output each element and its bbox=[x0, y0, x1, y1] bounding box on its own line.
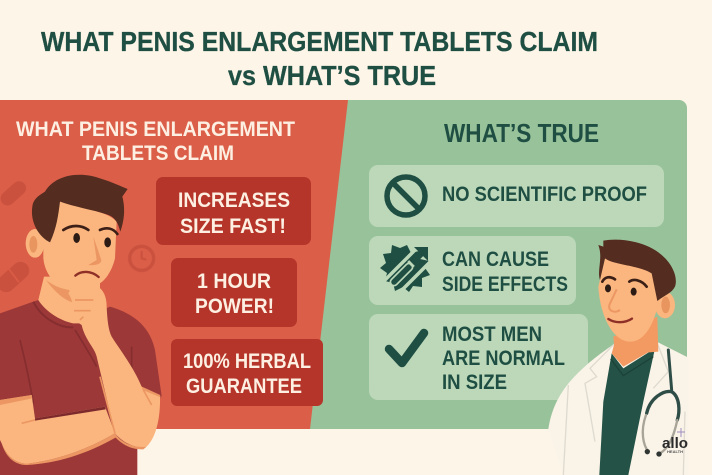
item: most men are normal in size: IN SIZE bbox=[442, 371, 507, 394]
claim: increases size fast: INCREASES bbox=[178, 189, 290, 212]
item: can cause side effects bbox=[369, 236, 576, 305]
claim: increases size fast bbox=[156, 177, 311, 245]
item: most men are normal in size: ARE NORMAL bbox=[442, 347, 565, 370]
lab coat, shirt and stethoscope bbox=[548, 337, 688, 475]
icons: faint pills and clock bbox=[0, 178, 154, 296]
heading: claims: WHAT PENIS ENLARGEMENT bbox=[16, 118, 295, 141]
claim: 1 hour power bbox=[171, 258, 297, 327]
item: no scientific proof: NO SCIENTIFIC PROOF bbox=[442, 183, 647, 206]
head bbox=[26, 175, 128, 302]
heading: what's true: WHAT’S TRUE bbox=[444, 118, 599, 148]
title bbox=[41, 26, 598, 91]
item: can cause side effects: SIDE EFFECTS bbox=[442, 273, 568, 296]
head bbox=[598, 240, 676, 355]
title: WHAT PENIS ENLARGEMENT TABLETS CLAIM bbox=[41, 26, 598, 57]
arms and hand bbox=[0, 284, 161, 465]
title: vs WHAT’S TRUE bbox=[228, 60, 436, 91]
logo: allo health: HEALTH bbox=[667, 450, 684, 454]
claim: 100% herbal guarantee bbox=[171, 339, 323, 406]
item: no scientific proof bbox=[369, 165, 664, 227]
illustration: worried man bbox=[0, 175, 162, 475]
panel: claims bbox=[0, 100, 348, 429]
icon: burst with arrows bbox=[380, 245, 434, 296]
illustration: doctor bbox=[548, 240, 688, 475]
claim: 100% herbal guarantee: GUARANTEE bbox=[186, 375, 302, 398]
logo: allo health bbox=[662, 428, 688, 454]
claim: 100% herbal guarantee: 100% HERBAL bbox=[183, 350, 311, 373]
claim: 1 hour power: 1 HOUR bbox=[197, 270, 271, 293]
heading: claims bbox=[16, 118, 295, 165]
claim: increases size fast: SIZE FAST! bbox=[180, 215, 286, 238]
item: most men are normal in size: MOST MEN bbox=[442, 323, 542, 346]
panel: what's true bbox=[300, 100, 687, 429]
item: most men are normal in size bbox=[369, 314, 588, 400]
item: can cause side effects: CAN CAUSE bbox=[442, 248, 549, 271]
logo: allo health: allo bbox=[662, 435, 688, 452]
torso: shirt and neck bbox=[0, 277, 162, 475]
heading: claims: TABLETS CLAIM bbox=[82, 142, 234, 165]
icon: check mark bbox=[389, 333, 424, 363]
claim: 1 hour power: POWER! bbox=[195, 295, 274, 318]
icon: prohibition sign bbox=[387, 177, 425, 215]
